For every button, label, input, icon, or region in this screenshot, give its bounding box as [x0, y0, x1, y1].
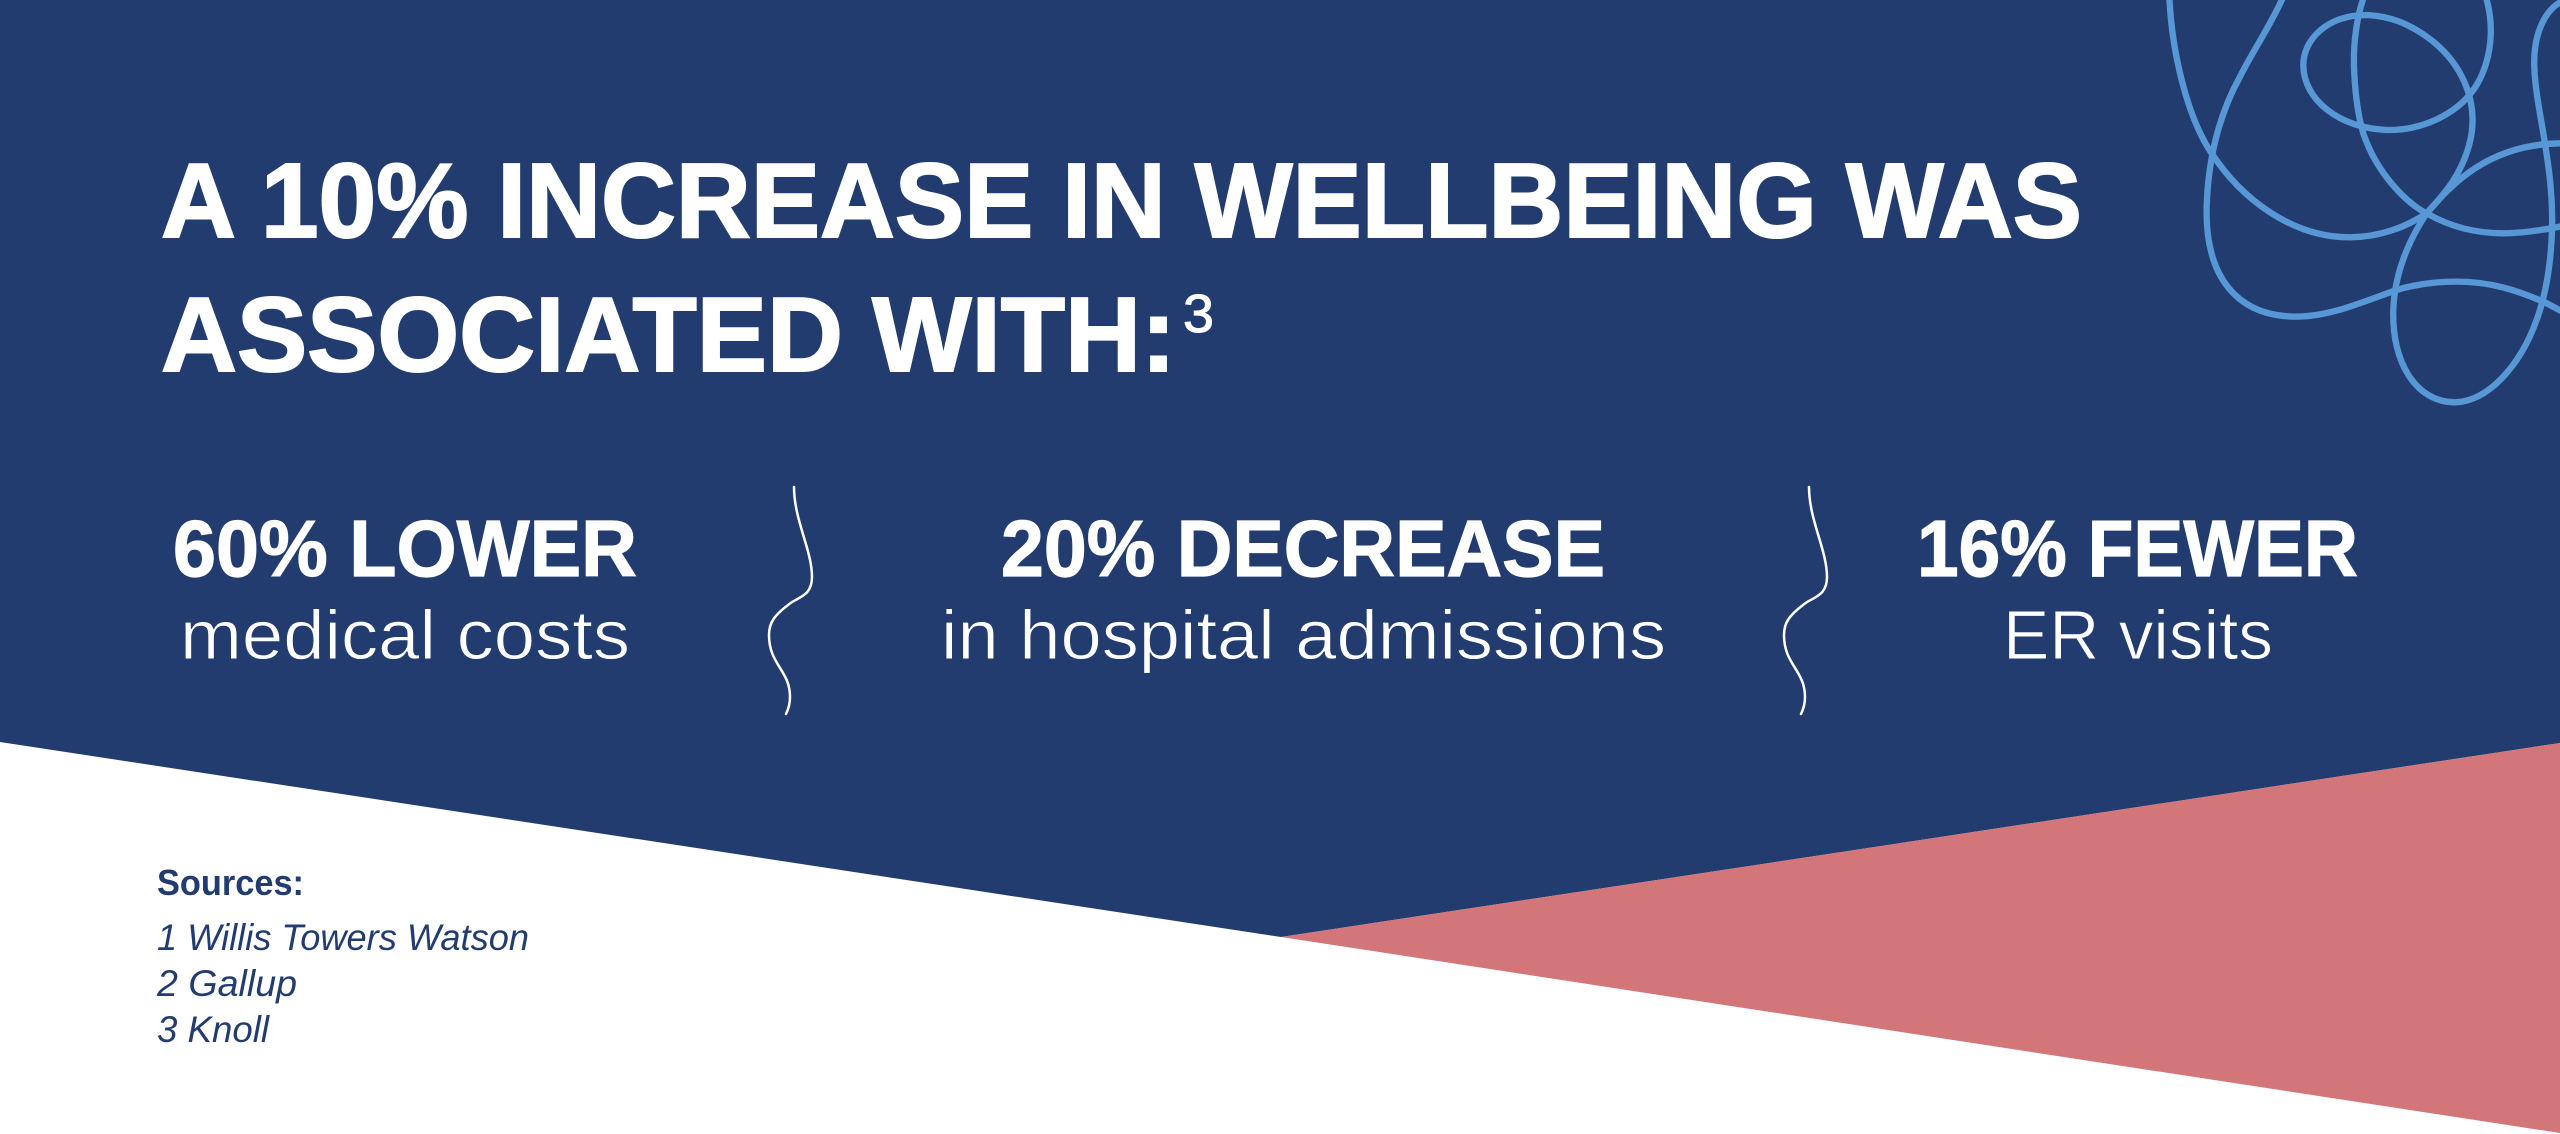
- title: 3: [1183, 284, 1214, 344]
- title: ASSOCIATED WITH:: [161, 276, 1176, 394]
- sources: Sources:: [157, 862, 304, 903]
- decorative blue scribble: [2169, 0, 2560, 402]
- stat: hospital admissions: [941, 504, 1666, 674]
- stat: medical costs: medical costs: [180, 596, 630, 674]
- stat: ER visits: [1917, 504, 2358, 674]
- pink triangle: [1281, 743, 2560, 1133]
- title: A 10% INCREASE IN WELLBEING WAS: [161, 142, 2082, 260]
- sources: 3 Knoll: [157, 1009, 271, 1050]
- stat: ER visits: 16% FEWER: [1917, 504, 2358, 593]
- wavy divider left: [769, 487, 812, 714]
- wavy divider right: [1784, 487, 1827, 714]
- sources: 2 Gallup: [156, 963, 297, 1004]
- stat: medical costs: 60% LOWER: [173, 504, 637, 593]
- sources: [156, 862, 529, 1050]
- title: [161, 142, 2082, 394]
- sources: 1 Willis Towers Watson: [157, 917, 529, 958]
- stat: hospital admissions: 20% DECREASE: [1001, 504, 1605, 593]
- stat: ER visits: ER visits: [2003, 596, 2273, 674]
- stat: hospital admissions: in hospital admissions: [941, 596, 1666, 674]
- stat: medical costs: [173, 504, 637, 674]
